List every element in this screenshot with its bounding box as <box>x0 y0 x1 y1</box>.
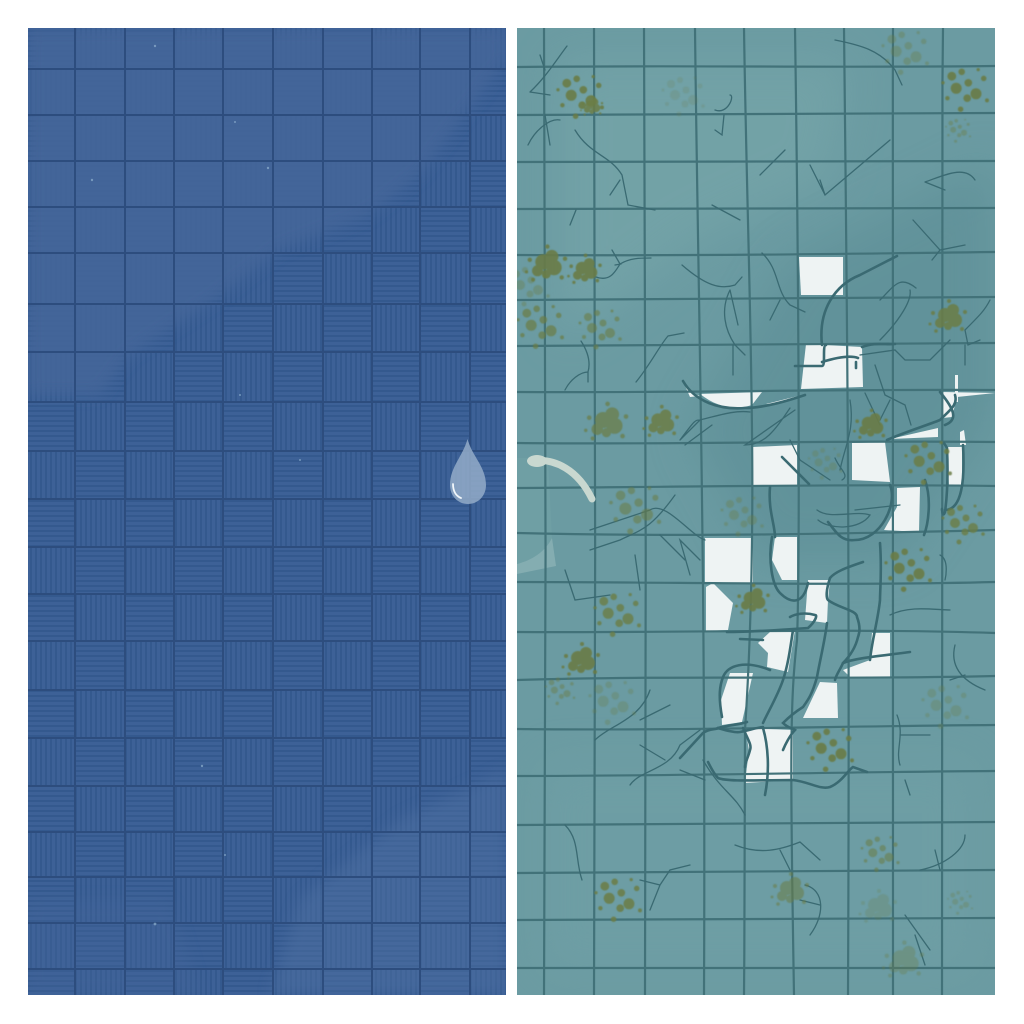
pale water stain streak <box>527 455 592 499</box>
grout grid, warped near the damage <box>517 66 995 968</box>
light wash: lower centre <box>540 760 975 975</box>
light wash: upper left <box>28 28 506 395</box>
light wedge at left edge <box>517 538 556 574</box>
moss patches <box>506 31 989 978</box>
light wash: upper area <box>560 60 850 340</box>
vertical-ribbed tiles <box>28 28 506 995</box>
panel: intact blue tile floor <box>28 28 506 995</box>
light wash: bottom left <box>28 900 200 995</box>
missing white tiles <box>683 257 995 783</box>
vertical rib texture <box>28 28 506 995</box>
dark wash: centre diagonal <box>721 201 976 540</box>
specks of light <box>91 45 301 925</box>
grout lines <box>28 28 506 995</box>
cracks: fine hairlines <box>528 40 990 965</box>
cracks: thick fractures through centre <box>680 256 964 795</box>
icon: water drop <box>450 439 486 504</box>
light wash: lower right <box>280 780 503 992</box>
horizontal-ribbed tiles <box>28 28 506 995</box>
panel: damaged teal tile floor <box>506 28 995 995</box>
